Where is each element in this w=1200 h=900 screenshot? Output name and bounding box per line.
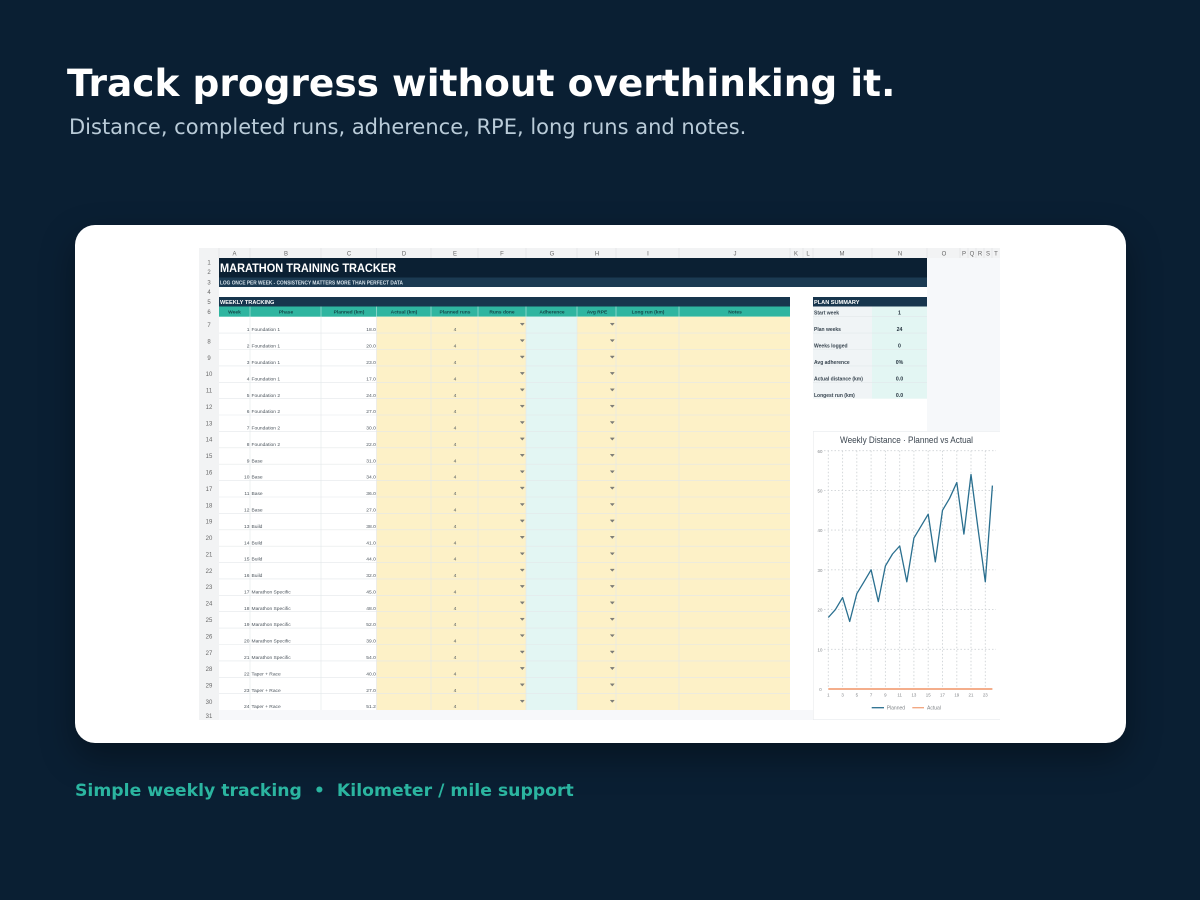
planned distance values: 20.0 (366, 344, 376, 350)
row header numbers: 19 (206, 520, 213, 526)
y axis labels (818, 449, 823, 692)
phase names: Marathon Specific (252, 622, 291, 628)
row header numbers: 14 (206, 438, 213, 444)
chart legend (872, 706, 941, 712)
x axis labels: 13 (911, 692, 917, 698)
chart legend: Planned (887, 706, 905, 712)
phase names: Foundation 1 (252, 360, 280, 366)
planned runs values: 4 (454, 475, 457, 481)
column header letters (199, 248, 1000, 258)
column header letters: L (806, 252, 810, 258)
planned distance values: 48.0 (366, 606, 376, 612)
week numbers: 21 (244, 655, 250, 661)
column header letters: S (986, 252, 990, 258)
section heading: weekly tracking (219, 297, 790, 306)
week numbers: 6 (247, 409, 250, 415)
column header letters: T (994, 252, 998, 258)
table column headers: Adherence (539, 310, 565, 316)
planned distance values: 17.0 (366, 376, 376, 382)
table column headers: Avg RPE (587, 310, 608, 316)
row header numbers: 7 (207, 323, 211, 329)
row header numbers: 31 (206, 714, 213, 720)
row header numbers: 10 (206, 372, 213, 378)
table column headers: Notes (728, 310, 742, 316)
column header letters: H (595, 252, 599, 258)
panel: plan summary: Longest run (km) (814, 393, 855, 399)
week numbers: 12 (244, 508, 250, 514)
x axis labels: 3 (841, 692, 844, 698)
phase names: Base (252, 508, 263, 514)
week numbers: 2 (247, 344, 250, 350)
planned runs values: 4 (454, 393, 457, 399)
planned runs values: 4 (454, 589, 457, 595)
phase names: Foundation 2 (252, 409, 280, 415)
column header letters: Q (970, 252, 975, 258)
row header numbers: 21 (206, 552, 213, 558)
x axis labels: 1 (827, 692, 830, 698)
x axis labels: 11 (897, 692, 903, 698)
phase names: Marathon Specific (252, 655, 291, 661)
column header letters: P (962, 252, 966, 258)
planned distance values: 41.0 (366, 540, 376, 546)
chart title: Weekly Distance · Planned vs Actual (840, 435, 973, 445)
column header letters: A (232, 252, 237, 258)
subtitle: Distance, completed runs, adherence, RPE, long runs and notes. (69, 115, 746, 139)
row header numbers: 4 (207, 290, 211, 296)
y axis labels: 0 (819, 687, 822, 692)
week numbers: 10 (244, 475, 250, 481)
x axis labels: 9 (884, 692, 887, 698)
planned distance values: 52.0 (366, 622, 376, 628)
table column headers: Phase (279, 310, 293, 316)
planned runs values: 4 (454, 426, 457, 432)
phase names: Marathon Specific (252, 589, 291, 595)
x axis labels: 5 (856, 692, 859, 698)
week numbers: 17 (244, 589, 250, 595)
week numbers: 13 (244, 524, 250, 530)
planned runs values: 4 (454, 573, 457, 579)
panel: spreadsheet card (75, 225, 1126, 743)
row header numbers: 22 (206, 569, 213, 575)
phase names: Foundation 1 (252, 376, 280, 382)
week numbers: 7 (247, 426, 250, 432)
phase names: Marathon Specific (252, 606, 291, 612)
phase names: Base (252, 458, 263, 464)
phase names: Taper + Race (252, 704, 281, 710)
planned distance values: 24.0 (366, 393, 376, 399)
table column headers: Long run (km) (632, 310, 665, 316)
table column headers: Actual (km) (391, 310, 418, 316)
table column headers: Week (228, 310, 241, 316)
week numbers: 1 (247, 327, 250, 333)
x axis labels: 19 (954, 692, 960, 698)
planned runs values: 4 (454, 508, 457, 514)
column header letters: K (794, 252, 798, 258)
panel: plan summary: Plan weeks (814, 327, 841, 333)
planned distance values: 40.0 (366, 671, 376, 677)
row header numbers: 11 (206, 389, 213, 395)
y axis labels: 40 (818, 528, 823, 533)
week numbers: 16 (244, 573, 250, 579)
input and calculated column fills (219, 317, 790, 710)
week numbers: 23 (244, 688, 250, 694)
planned runs values: 4 (454, 442, 457, 448)
sheet title banner (219, 258, 927, 287)
planned runs values: 4 (454, 704, 457, 710)
column header letters: C (347, 252, 352, 258)
row header numbers: 12 (206, 405, 213, 411)
planned distance values: 54.0 (366, 655, 376, 661)
x axis labels (827, 692, 988, 698)
panel: plan summary: Start week (814, 310, 839, 316)
panel: plan summary: 0 (898, 344, 901, 350)
week numbers: 8 (247, 442, 250, 448)
planned distance values: 45.0 (366, 589, 376, 595)
phase names: Taper + Race (252, 688, 281, 694)
week numbers: 18 (244, 606, 250, 612)
planned runs values (454, 327, 457, 710)
panel: plan summary: 0.0 (896, 376, 903, 382)
y axis labels: 50 (818, 488, 823, 494)
row header numbers: 18 (206, 503, 213, 509)
title: Track progress without overthinking it. (67, 61, 895, 105)
actual series line (828, 688, 992, 690)
line chart: weekly distance (813, 431, 1000, 720)
table column headers (219, 306, 790, 317)
phase names: Foundation 2 (252, 393, 280, 399)
panel: plan summary (813, 297, 927, 399)
row header numbers: 1 (207, 260, 211, 266)
planned distance values: 36.0 (366, 491, 376, 497)
planned distance values: 38.0 (366, 524, 376, 530)
row header numbers: 5 (207, 300, 211, 306)
planned runs values: 4 (454, 622, 457, 628)
x axis labels: 15 (926, 692, 931, 698)
row header numbers: 15 (206, 454, 213, 460)
planned distance values: 30.0 (366, 426, 376, 432)
panel: plan summary: PLAN SUMMARY (814, 300, 860, 306)
column header letters: B (284, 252, 288, 258)
column header letters: D (402, 252, 407, 258)
planned distance values: 31.0 (366, 458, 376, 464)
row header numbers: 30 (206, 700, 213, 706)
y axis labels: 10 (818, 647, 823, 652)
planned runs values: 4 (454, 557, 457, 563)
row header numbers: 8 (207, 339, 211, 345)
planned runs values: 4 (454, 606, 457, 612)
planned runs values: 4 (454, 360, 457, 366)
panel: plan summary: 24 (897, 327, 902, 333)
phase names: Foundation 1 (252, 344, 280, 350)
row header numbers: 17 (206, 487, 213, 493)
planned distance values: 34.0 (366, 475, 376, 481)
column header letters: F (500, 252, 504, 258)
week numbers: 5 (247, 393, 250, 399)
row header numbers: 9 (207, 356, 211, 362)
planned runs values: 4 (454, 376, 457, 382)
week numbers: 14 (244, 540, 250, 546)
planned distance values: 44.0 (366, 557, 376, 563)
planned distance values: 18.0 (366, 327, 376, 333)
icon: dropdown arrows (520, 323, 614, 702)
row header numbers: 3 (207, 280, 211, 286)
planned runs values: 4 (454, 344, 457, 350)
panel: plan summary: 0% (896, 360, 904, 366)
column header letters: I (647, 252, 649, 258)
week numbers: 20 (244, 639, 250, 645)
column header letters: J (734, 252, 736, 258)
planned runs values: 4 (454, 409, 457, 415)
row header numbers: 20 (206, 536, 213, 542)
week numbers: 24 (244, 704, 250, 710)
week numbers: 9 (247, 458, 250, 464)
planned distance values: 27.0 (366, 688, 376, 694)
week numbers: 4 (247, 376, 250, 382)
phase names: Build (252, 573, 263, 579)
planned runs values: 4 (454, 491, 457, 497)
phase names: Base (252, 491, 263, 497)
phase names (252, 327, 291, 710)
section heading: weekly tracking: WEEKLY TRACKING (220, 300, 274, 306)
planned distance values: 22.0 (366, 442, 376, 448)
row header numbers: 16 (206, 470, 213, 476)
week numbers (244, 327, 250, 710)
planned runs values: 4 (454, 655, 457, 661)
y axis labels: 20 (818, 608, 823, 612)
column header letters: O (942, 252, 947, 258)
panel: plan summary: 0.0 (896, 393, 903, 399)
phase names: Build (252, 540, 263, 546)
row header numbers (199, 258, 219, 720)
week numbers: 11 (244, 491, 250, 497)
planned runs values: 4 (454, 540, 457, 546)
planned distance values: 39.0 (366, 639, 376, 645)
column header letters: R (978, 252, 983, 258)
chart legend: Actual (927, 706, 941, 712)
week numbers: 19 (244, 622, 250, 628)
planned distance values: 51.2 (366, 704, 376, 710)
planned series line (828, 474, 992, 622)
panel: plan summary: 1 (898, 310, 901, 316)
phase names: Foundation 2 (252, 442, 280, 448)
table column headers: Planned (km) (334, 310, 365, 316)
planned distance values: 27.0 (366, 508, 376, 514)
panel: plan summary: Avg adherence (814, 360, 850, 366)
planned runs values: 4 (454, 639, 457, 645)
phase names: Marathon Specific (252, 639, 291, 645)
planned distance values (366, 327, 376, 710)
sheet title banner: LOG ONCE PER WEEK - CONSISTENCY MATTERS MORE THAN PERFECT DATA (220, 280, 403, 286)
row header numbers: 13 (206, 421, 213, 427)
column header letters: E (453, 252, 457, 258)
planned distance values: 27.0 (366, 409, 376, 415)
table column headers: Planned runs (440, 310, 471, 316)
column header letters: G (550, 252, 555, 258)
sheet background (199, 248, 1000, 720)
planned runs values: 4 (454, 524, 457, 530)
phase names: Build (252, 524, 263, 530)
week numbers: 22 (244, 671, 250, 677)
planned runs values: 4 (454, 671, 457, 677)
weekly tracking table (219, 297, 790, 710)
phase names: Taper + Race (252, 671, 281, 677)
row header numbers: 23 (206, 585, 213, 591)
planned distance values: 23.0 (366, 360, 376, 366)
row header numbers: 27 (206, 651, 213, 657)
planned distance values: 32.0 (366, 573, 376, 579)
column header letters: M (840, 252, 844, 258)
phase names: Build (252, 557, 263, 563)
planned runs values: 4 (454, 327, 457, 333)
row header numbers: 29 (206, 684, 213, 690)
phase names: Foundation 2 (252, 426, 280, 432)
sheet title banner: MARATHON TRAINING TRACKER (220, 262, 397, 275)
x axis labels: 23 (983, 692, 988, 698)
row header numbers: 25 (206, 618, 213, 624)
footer feature line: Simple weekly tracking • Kilometer / mile support (75, 781, 574, 801)
planned runs values: 4 (454, 688, 457, 694)
x axis labels: 21 (969, 692, 974, 698)
phase names: Foundation 1 (252, 327, 280, 333)
row header numbers: 28 (206, 667, 213, 673)
row header numbers: 6 (207, 310, 211, 316)
y axis labels: 60 (818, 449, 823, 454)
column header letters: N (898, 252, 902, 258)
row header numbers: 2 (207, 270, 211, 276)
x axis labels: 7 (870, 692, 873, 698)
phase names: Base (252, 475, 263, 481)
y axis labels: 30 (818, 568, 823, 573)
week numbers: 3 (247, 360, 250, 366)
panel: plan summary: Actual distance (km) (814, 376, 863, 382)
table column headers: Runs done (489, 310, 515, 316)
planned runs values: 4 (454, 458, 457, 464)
panel: plan summary: Weeks logged (814, 344, 848, 350)
x axis labels: 17 (940, 692, 945, 698)
row header numbers: 24 (206, 602, 213, 608)
week numbers: 15 (244, 557, 250, 563)
row header numbers: 26 (206, 634, 213, 640)
